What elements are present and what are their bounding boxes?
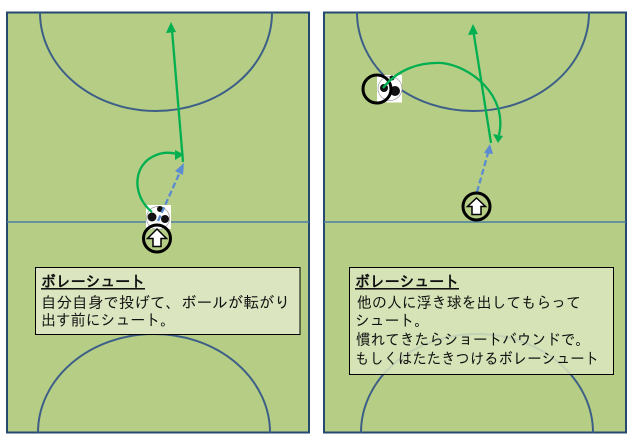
dashed blue run arrow <box>477 144 493 192</box>
midfield line <box>7 221 309 223</box>
icon: player with up arrow <box>463 193 490 220</box>
body line 4: もしくはたたきつけるボレーシュート <box>355 351 599 368</box>
court background <box>7 12 309 432</box>
body line 3: 慣れてきたらショートバウンドで。 <box>356 332 590 349</box>
text box: right description <box>350 268 614 374</box>
bottom goal arc <box>38 334 270 432</box>
icon: player with up arrow <box>144 225 170 252</box>
bottom goal arc <box>361 334 593 432</box>
body line 1: 他の人に浮き球を出してもらって <box>357 295 581 312</box>
icon: soccer ball <box>146 205 171 230</box>
body line 2: シュート。 <box>355 313 429 330</box>
top goal arc <box>357 12 589 111</box>
curved green pass arrow <box>383 63 503 143</box>
midfield line <box>324 221 626 223</box>
player circle <box>363 75 391 103</box>
heading: ボレーシュート <box>41 273 145 291</box>
straight green shot arrow <box>166 22 183 162</box>
body line 1: 自分自身で投げて、ボールが転がり <box>41 294 290 312</box>
panel: right court <box>324 12 626 432</box>
top goal arc <box>40 12 272 111</box>
text box: left description <box>36 268 300 334</box>
court background <box>324 12 626 432</box>
straight green shot arrow <box>468 24 491 143</box>
body line 2: 出す前にシュート。 <box>41 312 175 330</box>
dashed blue run arrow <box>158 163 184 221</box>
icon: soccer ball <box>377 75 402 102</box>
curved green pass arrow <box>137 150 184 212</box>
panel: left court <box>7 12 309 432</box>
heading: ボレーシュート <box>355 273 459 291</box>
